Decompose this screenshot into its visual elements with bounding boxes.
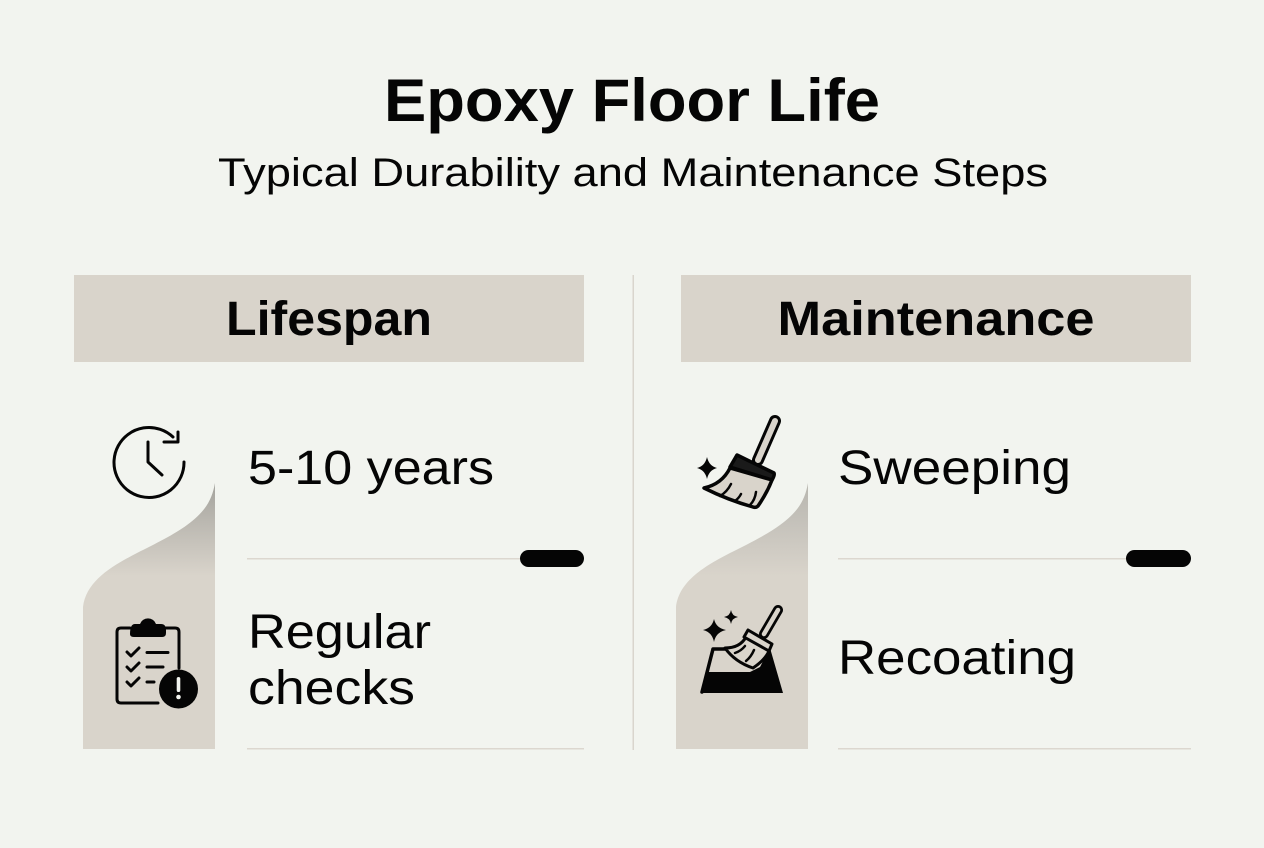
panel: lifespan xyxy=(74,275,584,750)
row divider xyxy=(838,558,1128,560)
lifespan header: Lifespan xyxy=(226,293,432,346)
row divider xyxy=(838,748,1191,750)
maintenance header: Maintenance xyxy=(778,293,1094,346)
row divider xyxy=(247,748,584,750)
panel: maintenance xyxy=(676,275,1191,750)
icon: clipboard with alert xyxy=(117,618,198,708)
icon: broom with sparkle xyxy=(697,421,775,507)
row divider xyxy=(247,558,522,560)
center divider xyxy=(632,275,634,750)
icon: clock with arrow xyxy=(114,427,184,497)
curved backdrop xyxy=(676,483,808,749)
maintenance header xyxy=(681,275,1191,362)
lifespan header xyxy=(74,275,584,362)
pill marker xyxy=(1126,550,1191,567)
text: 5-10 years: 5-10 years xyxy=(248,442,494,495)
subtitle: Typical Durability and Maintenance Steps xyxy=(218,151,1048,195)
pill marker xyxy=(520,550,584,567)
text: regular checks: Regular xyxy=(248,606,431,659)
text: regular checks: checks xyxy=(248,662,415,715)
text: recoating: Recoating xyxy=(838,632,1076,685)
title: Epoxy Floor Life xyxy=(384,67,880,134)
icon: brush over paint tray xyxy=(702,610,783,693)
curved backdrop xyxy=(83,483,215,749)
text: sweeping: Sweeping xyxy=(838,442,1071,495)
text: regular checks xyxy=(248,606,431,715)
